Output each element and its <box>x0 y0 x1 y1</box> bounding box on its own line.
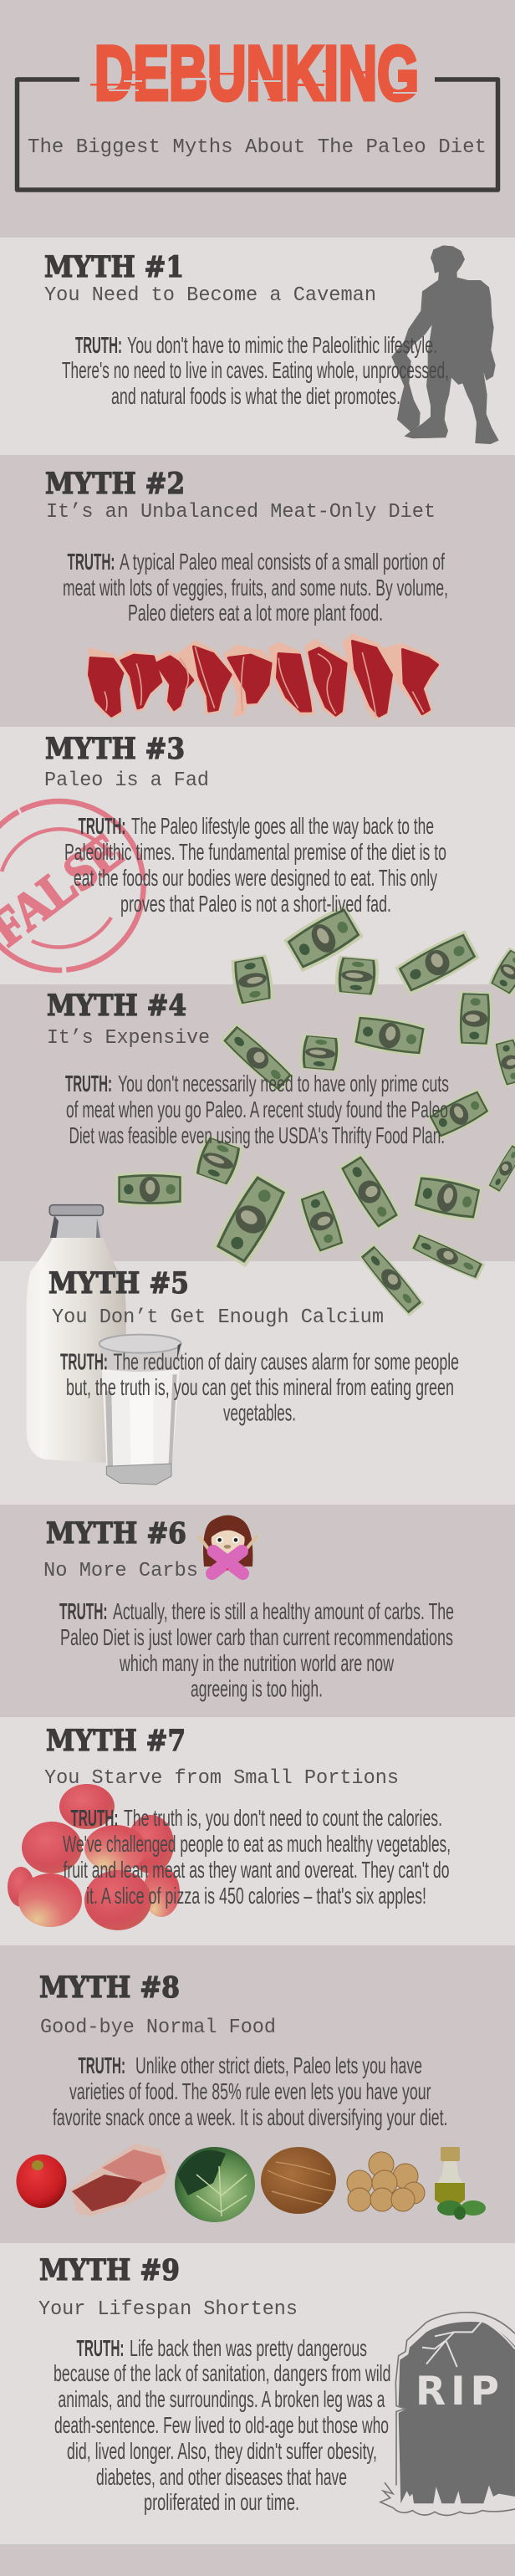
panel: myth 6 background <box>0 1505 515 1717</box>
heading: MYTH #2 <box>45 467 185 501</box>
truth text: TRUTH: <box>60 1348 108 1375</box>
myth statement: Your Lifespan Shortens <box>38 2298 298 2321</box>
panel: footer band <box>0 2544 515 2576</box>
truth text: TRUTH: <box>79 813 125 839</box>
icon: caveman silhouette <box>391 245 499 444</box>
image: row of meat chops <box>88 634 441 719</box>
truth text <box>59 1598 454 1701</box>
heading: MYTH #6 <box>46 1516 186 1551</box>
panel: myth 7 background <box>0 1717 515 1945</box>
truth text <box>53 2052 448 2130</box>
image: row of paleo foods <box>17 2144 486 2222</box>
myth statement: You Need to Become a Caveman <box>44 284 376 307</box>
milk bottle <box>27 1205 126 1463</box>
food: raw meat <box>70 2144 171 2216</box>
myth 9 text <box>38 2253 391 2515</box>
food: coconut <box>261 2147 336 2214</box>
heading: MYTH #7 <box>46 1724 186 1758</box>
truth text: TRUTH: <box>67 549 115 575</box>
myth statement: Paleo is a Fad <box>44 769 209 792</box>
myth statement: No More Carbs <box>43 1560 198 1582</box>
panel: myth 8 background <box>0 1945 515 2243</box>
icon: RIP tombstone <box>380 2313 515 2515</box>
myth 6 text <box>43 1516 454 1701</box>
myth 5 text <box>48 1266 459 1425</box>
truth text: diabetes, and other diseases that have <box>96 2464 347 2490</box>
truth text <box>62 332 449 409</box>
subtitle: The Biggest Myths About The Paleo Diet <box>28 136 487 159</box>
myth statement: You Don’t Get Enough Calcium <box>52 1306 384 1329</box>
food: apple <box>17 2154 67 2208</box>
truth text <box>63 1805 451 1909</box>
milk glass <box>99 1335 181 1485</box>
panel: myth 2 background <box>0 455 515 727</box>
icon: RIP tombstone: RIP <box>416 2369 499 2415</box>
image: milk bottle and glass <box>27 1205 181 1485</box>
panel: myth 5 background <box>0 1261 515 1505</box>
myth 2 text <box>45 467 448 626</box>
heading: MYTH #5 <box>48 1266 189 1301</box>
truth text: proliferated in our time. <box>144 2489 299 2515</box>
heading: MYTH #9 <box>39 2253 180 2287</box>
truth text: TRUTH: <box>79 2052 125 2078</box>
myth 8 text <box>39 1970 448 2130</box>
panel: myth 3 background <box>0 727 515 984</box>
image: falling money <box>115 903 515 1317</box>
truth text: vegetables. <box>223 1400 296 1425</box>
truth text <box>64 813 446 917</box>
panel: myth 9 background <box>0 2243 515 2544</box>
truth text: Life back then was pretty dangerous <box>130 2335 367 2361</box>
myth 4 text <box>47 989 449 1148</box>
myth statement: It’s an Unbalanced Meat-Only Diet <box>46 501 436 524</box>
myth 7 text <box>44 1724 451 1909</box>
panel: myth 4 background <box>0 984 515 1261</box>
myth statement: Good-bye Normal Food <box>40 2016 276 2039</box>
truth text: TRUTH: <box>59 1598 107 1624</box>
myth 3 text <box>44 732 446 917</box>
panel: myth 1 background <box>0 238 515 455</box>
truth text <box>54 2335 391 2515</box>
truth text <box>65 1071 449 1148</box>
image: pile of apples <box>8 1784 180 1930</box>
truth text: TRUTH: <box>70 1805 119 1831</box>
truth text <box>63 549 448 626</box>
truth text: TRUTH: <box>77 2335 124 2361</box>
heading: MYTH #3 <box>45 732 185 766</box>
myth statement: It’s Expensive <box>47 1027 210 1050</box>
food: olive oil and basil <box>435 2147 486 2220</box>
food: walnuts <box>347 2152 425 2211</box>
truth text <box>60 1348 459 1425</box>
panel: header background <box>0 0 515 238</box>
heading: MYTH #1 <box>44 250 184 284</box>
header frame <box>17 79 498 190</box>
food: cabbage <box>175 2147 255 2222</box>
myth 1 text <box>44 250 449 409</box>
truth text: agreeing is too high. <box>191 1676 323 1701</box>
myth statement: You Starve from Small Portions <box>44 1767 399 1790</box>
icon: emoji person crossing arms <box>199 1515 257 1573</box>
truth text: TRUTH: <box>65 1071 112 1096</box>
heading: MYTH #4 <box>47 989 186 1023</box>
truth text: TRUTH: <box>75 332 122 358</box>
heading: MYTH #8 <box>39 1970 180 2005</box>
